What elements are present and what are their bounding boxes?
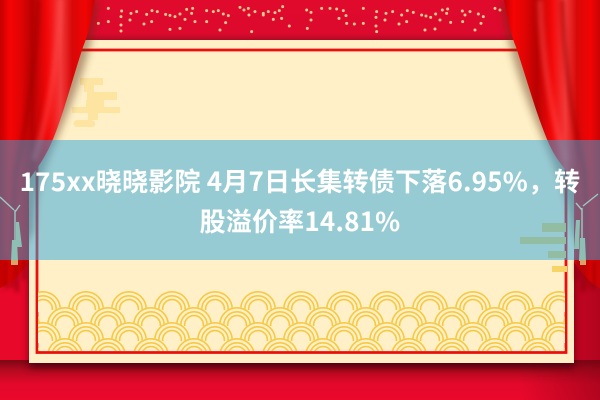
title text: 175xx晓晓影院 4月7日长集转债下落6.95%，转 <box>20 162 580 199</box>
lower right shading <box>520 262 600 400</box>
left curtain <box>0 0 95 292</box>
red frame <box>37 50 566 352</box>
cloud right <box>520 223 567 272</box>
translucent title band <box>0 140 600 260</box>
bottom red band <box>0 360 600 400</box>
card shadow <box>29 44 574 368</box>
title text <box>20 162 580 239</box>
tassel left <box>0 197 22 265</box>
cloud left <box>72 78 120 127</box>
title text: 股溢价率14.81% <box>200 202 400 239</box>
curtain shadow right <box>502 0 600 290</box>
curtain shadow left <box>0 0 98 290</box>
right curtain <box>504 0 600 292</box>
gold confetti left <box>98 7 289 32</box>
top red band <box>0 0 600 41</box>
cream card <box>29 40 574 363</box>
gold confetti right <box>307 8 500 32</box>
tassel right <box>574 194 598 265</box>
scale wave pattern <box>38 291 565 351</box>
